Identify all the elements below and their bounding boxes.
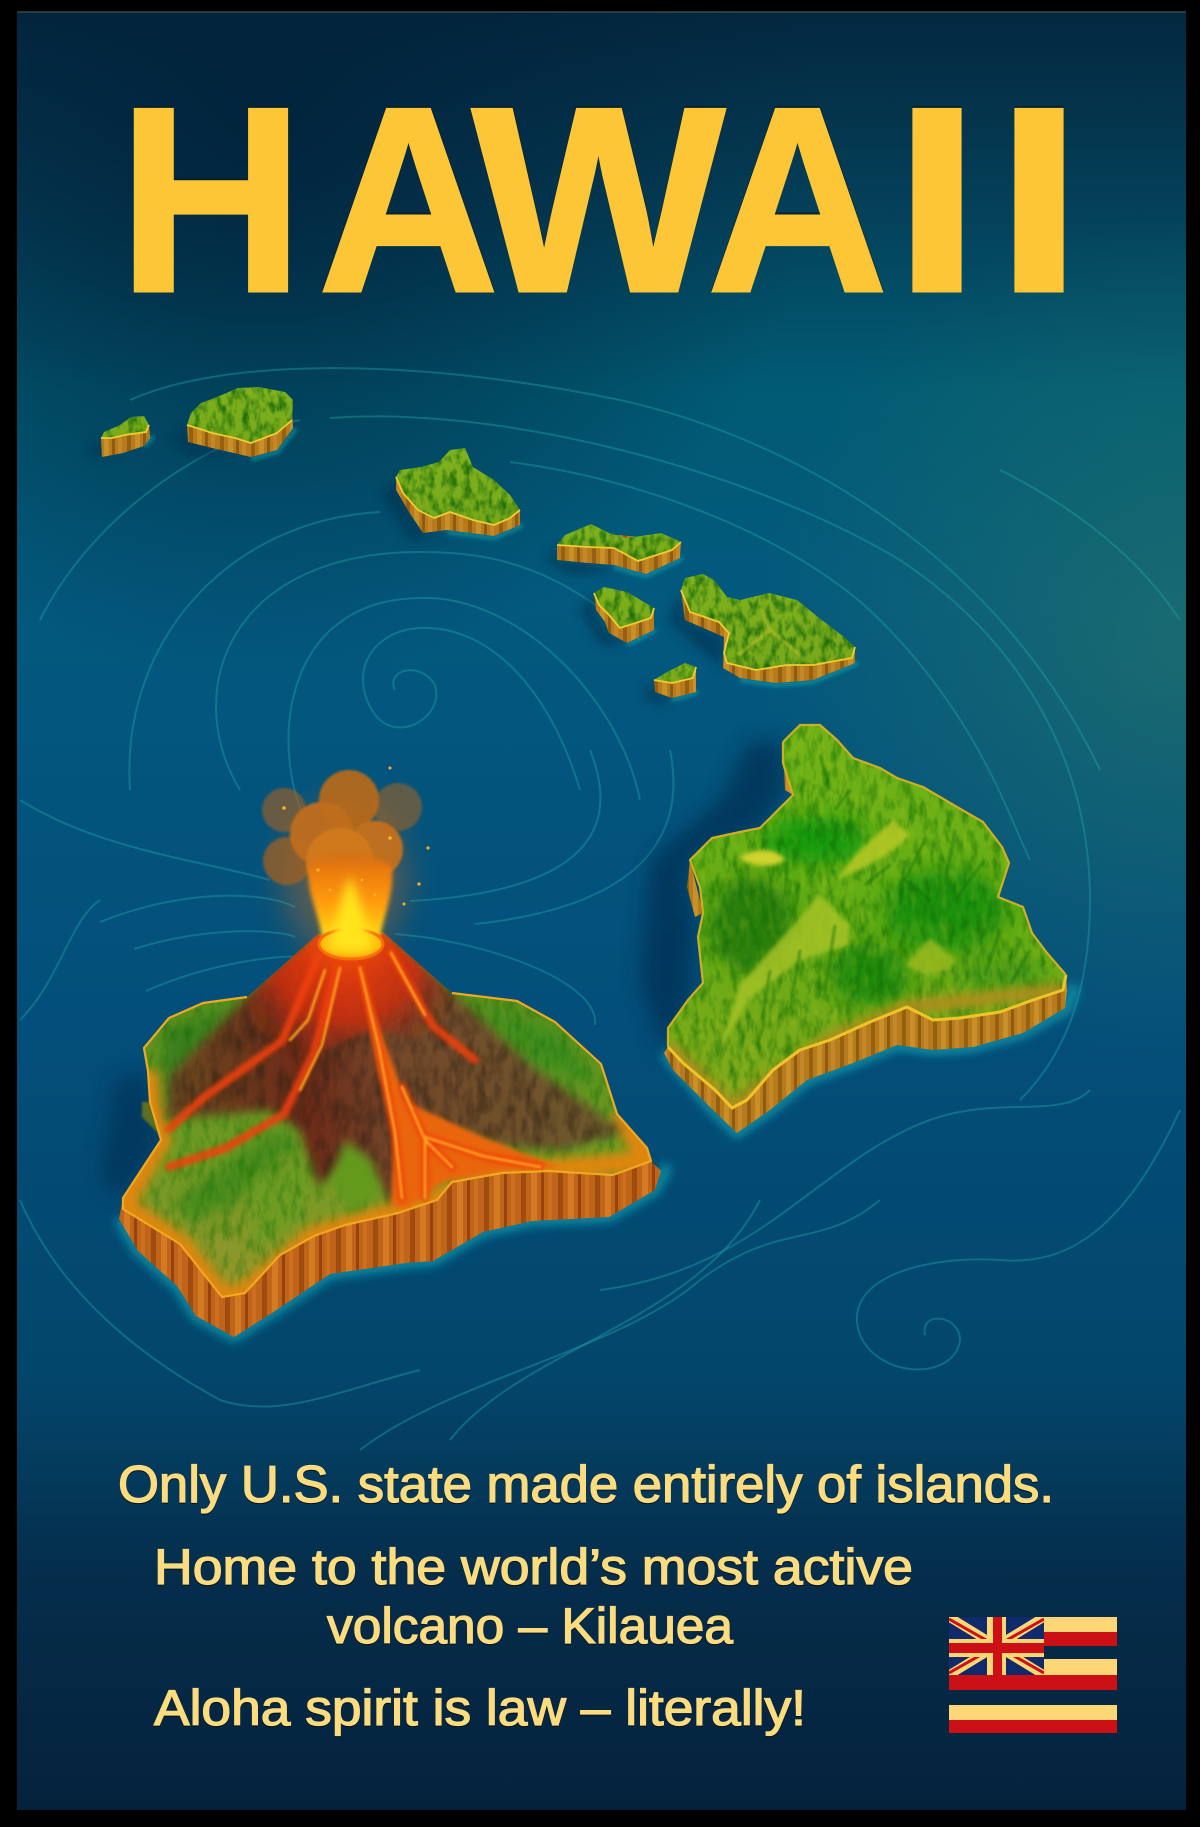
Hawaiian flag xyxy=(949,1617,1117,1733)
island: Maui xyxy=(681,574,855,683)
sparks xyxy=(282,766,430,906)
title xyxy=(118,52,1083,347)
volcano island cliff wall xyxy=(119,1100,661,1337)
volcano cone xyxy=(159,932,628,1206)
title: W xyxy=(472,52,727,347)
volcano island coastline xyxy=(123,993,651,1297)
title: A xyxy=(707,52,888,347)
drainage channels xyxy=(762,755,1030,1020)
plume glow xyxy=(283,800,407,960)
island: Big Island (green) xyxy=(640,720,1080,1133)
big island shadow xyxy=(640,740,785,1053)
fact: aloha spirit: Aloha spirit is law – literally! xyxy=(154,1680,806,1736)
title: A xyxy=(318,52,499,347)
island: Niihau xyxy=(101,416,150,457)
vegetation patches xyxy=(160,1005,600,1250)
coastal olive edge xyxy=(668,990,1063,1108)
big island shoreline glow xyxy=(664,985,1075,1133)
island: Molokai xyxy=(557,524,681,574)
island: Kahoolawe xyxy=(654,663,696,698)
terrain shading xyxy=(710,816,1045,1007)
volcano shoreline glow xyxy=(119,1165,668,1337)
flag stripes xyxy=(949,1617,1117,1733)
big island coastline xyxy=(668,975,1066,1108)
title: I xyxy=(893,52,981,347)
big island cliff wall xyxy=(664,742,1067,1133)
volcano island top surface xyxy=(124,932,650,1296)
vegetation texture xyxy=(138,986,626,1288)
island: volcano (Kilauea) xyxy=(100,920,670,1337)
lava fountain xyxy=(308,852,392,936)
fact: active volcano xyxy=(154,1539,913,1654)
volcano eruption plume xyxy=(262,766,430,960)
island shadows and shallow-water glows xyxy=(88,425,858,705)
smoke cloud xyxy=(262,770,422,896)
island: Kauai xyxy=(187,387,293,457)
fact: active volcano: Home to the world’s most active xyxy=(154,1539,913,1595)
vegetation texture xyxy=(669,726,1063,1098)
volcano island shadow xyxy=(100,1071,161,1198)
ocean current swirl lines xyxy=(20,368,1180,1450)
big island top surface xyxy=(669,726,1064,1106)
island: Lanai xyxy=(594,587,654,643)
green tongue between rock valleys xyxy=(330,1140,382,1210)
crater xyxy=(319,929,383,959)
title: H xyxy=(118,52,304,347)
coastal orange edge xyxy=(123,1071,651,1297)
fact: active volcano: volcano – Kilauea xyxy=(327,1598,733,1654)
mountain ridges xyxy=(720,820,955,1050)
lava flows xyxy=(169,953,540,1198)
island: Oahu xyxy=(396,448,520,536)
union jack canton xyxy=(949,1617,1044,1675)
cone red glow xyxy=(246,932,450,1052)
fact: only state made of islands: Only U.S. state made entirely of islands. xyxy=(118,1456,1054,1514)
title: I xyxy=(995,52,1083,347)
lava fan xyxy=(366,995,556,1210)
